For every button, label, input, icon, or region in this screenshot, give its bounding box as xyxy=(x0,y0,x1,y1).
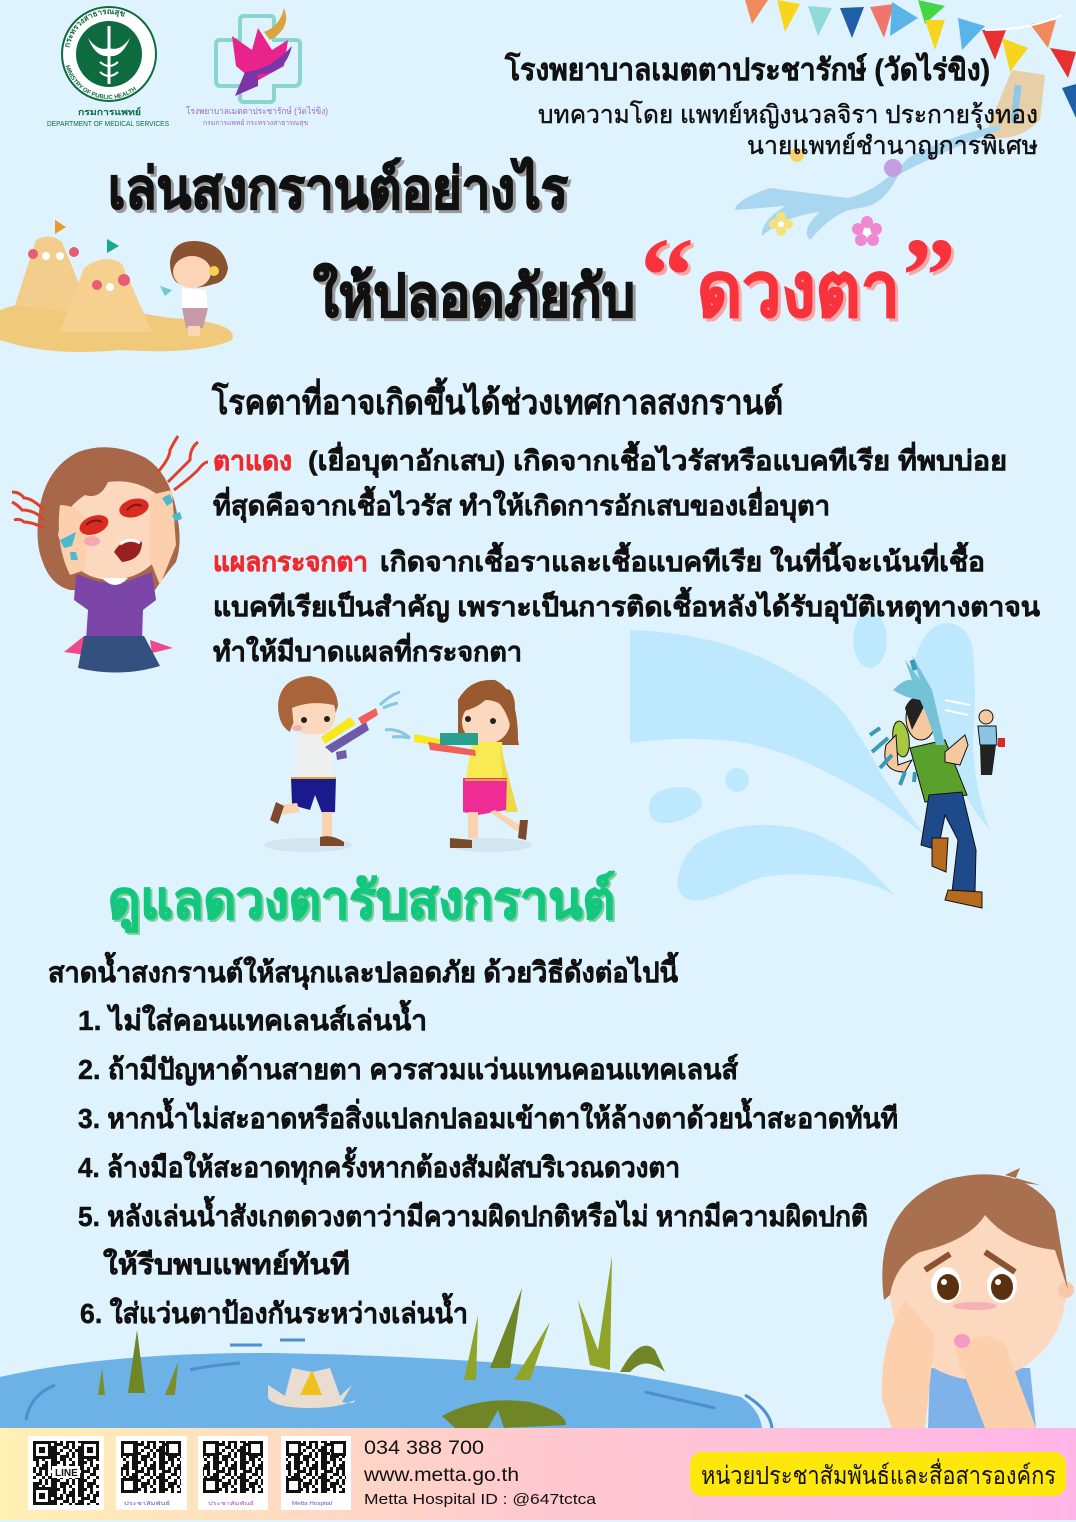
illustration: girl with water gun xyxy=(385,680,532,852)
symptom: corneal ulcer: ทำให้มีบาดแผลที่กระจกตา xyxy=(213,632,522,667)
heading: eye care: ดูแลดวงตารับสงกรานต์ xyxy=(108,871,615,933)
title highlight: ” xyxy=(902,217,956,336)
qr codes: Metta Hospital xyxy=(292,1501,332,1507)
contact details xyxy=(363,1438,597,1508)
care tips list: 2. ถ้ามีปัญหาด้านสายตา ควรสวมแว่นแทนคอนแทคเลนส์ xyxy=(78,1054,739,1086)
logo: ministry of public health: MINISTRY OF PUBLIC HEALTH xyxy=(66,65,136,99)
care tips list: 6. ใส่แว่นตาป้องกันระหว่างเล่นน้ำ xyxy=(80,1292,468,1329)
logo: ministry of public health: DEPARTMENT OF MEDICAL SERVICES xyxy=(47,121,169,128)
symptom: red eye: (เยื่อบุตาอักเสบ) เกิดจากเชื้อไวรัสหรือแบคทีเรีย ที่พบบ่อย xyxy=(308,440,1007,478)
title highlight xyxy=(640,217,956,336)
care tips list: ให้รีบพบแพทย์ทันที xyxy=(103,1248,350,1280)
illustration: crying girl with red eyes xyxy=(12,436,208,673)
logo: metta hospital: กรมการแพทย์ กระทรวงสาธารณสุข xyxy=(203,119,308,127)
logo: ministry of public health xyxy=(47,6,169,128)
symptom: red eye xyxy=(213,440,1007,523)
department badge xyxy=(690,1452,1066,1496)
title highlight: “ xyxy=(640,217,694,336)
symptom: corneal ulcer xyxy=(213,541,1041,667)
illustration: pond with reeds and lily xyxy=(0,1256,772,1428)
care tips list: 4. ล้างมือให้สะอาดทุกครั้งหากต้องสัมผัสบริเวณดวงตา xyxy=(78,1146,680,1185)
contact details: Metta Hospital ID : @647tctca xyxy=(364,1491,597,1508)
author line 1: บทความโดย แพทย์หญิงนวลจิรา ประกายรุ้งทอง xyxy=(538,100,1038,130)
title highlight: ดวงตา xyxy=(697,248,900,333)
symptom: red eye: ที่สุดคือจากเชื้อไวรัส ทำให้เกิดการอักเสบของเยื่อบุตา xyxy=(213,485,830,523)
author line 2: นายแพทย์ชำนาญการพิเศษ xyxy=(747,132,1038,160)
symptom: corneal ulcer: เกิดจากเชื้อราและเชื้อแบคทีเรีย ในที่นี้จะเน้นที่เชื้อ xyxy=(380,541,985,577)
background water swoosh xyxy=(630,612,990,901)
icon: pink flower xyxy=(852,216,882,246)
qr codes xyxy=(28,1436,351,1510)
illustration: man splashed with water xyxy=(870,655,1005,908)
splash of water from bowl xyxy=(735,70,1045,246)
logo: metta hospital xyxy=(186,8,328,127)
icon: yellow flower xyxy=(769,212,793,236)
care tips list: 1. ไม่ใส่คอนแทคเลนส์เล่นน้ำ xyxy=(78,999,427,1036)
illustration: sand pagodas xyxy=(0,220,233,352)
bunting flags xyxy=(745,0,1076,118)
footer band xyxy=(0,1428,1076,1520)
illustration: boy with water gun xyxy=(264,676,400,852)
qr codes: ประชาสัมพันธ์ xyxy=(124,1500,170,1507)
logo: metta hospital: โรงพยาบาลเมตตาประชารักษ์ (วัดไร่ขิง) xyxy=(186,105,328,116)
subheading: eye diseases: โรคตาที่อาจเกิดขึ้นได้ช่วงเทศกาลสงกรานต์ xyxy=(211,377,783,422)
title line 2: ให้ปลอดภัยกับ xyxy=(313,262,635,329)
contact details: www.metta.go.th xyxy=(363,1465,519,1486)
illustration: boy with sore eyes xyxy=(882,1168,1074,1428)
hospital name: โรงพยาบาลเมตตาประชารักษ์ (วัดไร่ขิง) xyxy=(504,51,990,87)
intro line: สาดน้ำสงกรานต์ให้สนุกและปลอดภัย ด้วยวิธีดังต่อไปนี้ xyxy=(48,951,679,990)
logo: ministry of public health: กรมการแพทย์ xyxy=(78,106,141,117)
title line 1: เล่นสงกรานต์อย่างไร xyxy=(108,156,568,220)
symptom: corneal ulcer: แบคทีเรียเป็นสำคัญ เพราะเป็นการติดเชื้อหลังได้รับอุบัติเหตุทางตาจน xyxy=(213,586,1041,624)
qr codes: ประชาสัมพันธ์ xyxy=(208,1500,254,1507)
symptom: corneal ulcer: แผลกระจกตา xyxy=(213,547,368,577)
qr codes: LINE xyxy=(55,1468,78,1479)
care tips list: 5. หลังเล่นน้ำสังเกตดวงตาว่ามีความผิดปกติหรือไม่ หากมีความผิดปกติ xyxy=(78,1195,868,1232)
contact details: 034 388 700 xyxy=(364,1438,484,1459)
illustration: thai girl with bowl xyxy=(160,241,228,336)
logo: ministry of public health: กระทรวงสาธารณสุข xyxy=(65,9,126,48)
symptom: red eye: ตาแดง xyxy=(213,446,292,476)
care tips list: 3. หากน้ำไม่สะอาดหรือสิ่งแปลกปลอมเข้าตาให้ล้างตาด้วยน้ำสะอาดทันที xyxy=(78,1097,898,1134)
care tips list xyxy=(78,999,898,1329)
